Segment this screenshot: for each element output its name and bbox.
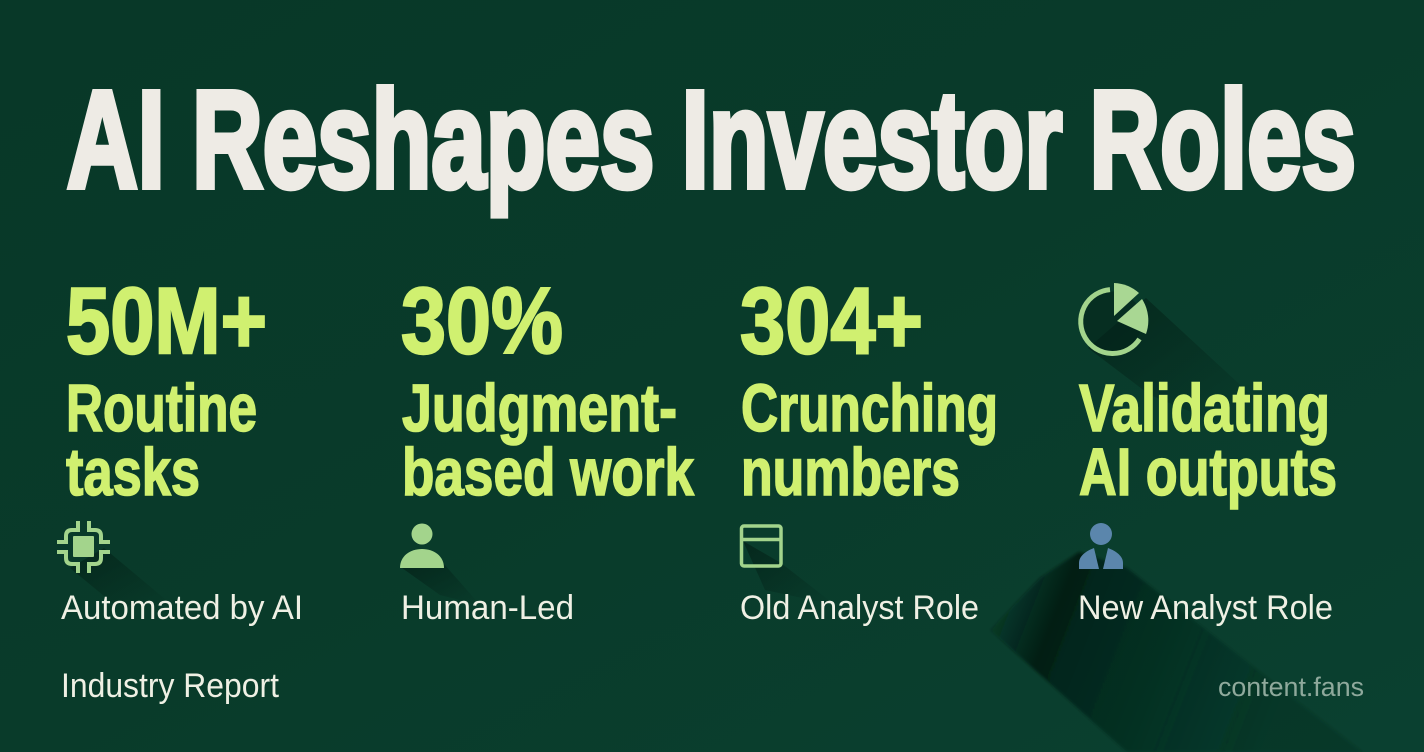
- label: Crunching numbers: Crunching: [741, 371, 998, 446]
- label: Routine tasks: Routine: [66, 371, 257, 446]
- icon: analyst with tie: [1079, 523, 1123, 569]
- label: Judgment-based work: [402, 371, 695, 510]
- icon: chip: [57, 521, 110, 573]
- label: Judgment-based work: based work: [402, 435, 695, 510]
- column 4: validating AI outputs: [1078, 283, 1337, 627]
- stat: 304+: 304+: [740, 268, 923, 373]
- label: Crunching numbers: numbers: [741, 435, 960, 510]
- label: Validating AI outputs: [1079, 371, 1337, 510]
- column 3: crunching numbers: [740, 268, 998, 627]
- icon: person: [400, 524, 444, 568]
- shadow: pie icon: [1088, 298, 1262, 430]
- label: Routine tasks: tasks: [66, 435, 200, 510]
- icon: pie chart: [1081, 283, 1148, 353]
- stat: 50M+: 50M+: [66, 268, 267, 373]
- label: Judgment-based work: Judgment-: [402, 371, 677, 446]
- footer: Industry Report: Industry Report: [61, 667, 280, 705]
- stat: 30%: 30%: [401, 268, 563, 373]
- shadow: window icon: [743, 541, 835, 605]
- footer: content.fans: content.fans: [1218, 672, 1364, 702]
- caption: Old Analyst Role: Old Analyst Role: [740, 589, 979, 627]
- caption: Automated by AI: Automated by AI: [61, 589, 303, 627]
- shadow: chip icon: [70, 548, 172, 605]
- icon: window: [742, 526, 781, 566]
- column 2: judgment-based work: [400, 268, 695, 627]
- label: Routine tasks: [66, 371, 257, 510]
- label: Crunching numbers: [741, 371, 998, 510]
- shadow: new analyst icon: [990, 552, 1362, 752]
- caption: Human-Led: Human-Led: [401, 589, 574, 627]
- column 1: routine tasks: [57, 268, 303, 627]
- shadow: person icon: [402, 564, 480, 605]
- caption: New Analyst Role: New Analyst Role: [1078, 589, 1333, 627]
- label: Validating AI outputs: Validating: [1079, 371, 1330, 446]
- label: Validating AI outputs: AI outputs: [1079, 435, 1337, 510]
